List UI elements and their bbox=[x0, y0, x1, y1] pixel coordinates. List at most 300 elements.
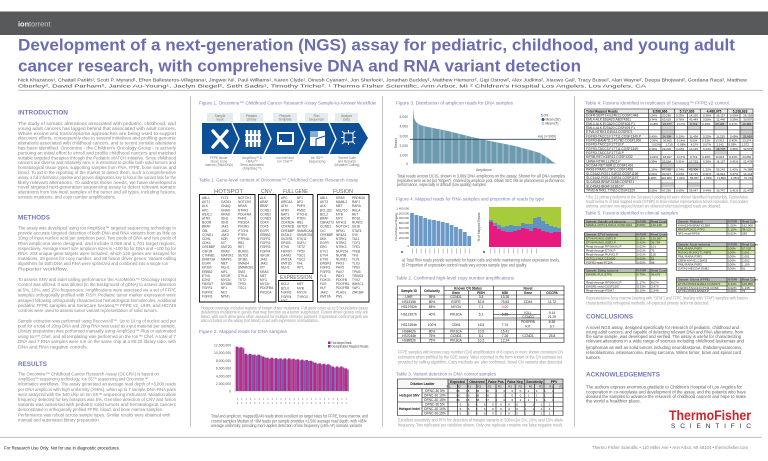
table 2: copy number amplifications: Novel bbox=[524, 286, 533, 290]
hotspot genes: FGFR2 bbox=[202, 290, 213, 294]
workflow step labels: Run bbox=[314, 114, 320, 118]
table 2: copy number amplifications: 21.29 bbox=[548, 315, 556, 319]
table 5 text: CBFB-MYH11.C5M33 bbox=[678, 259, 708, 263]
figure 3: amplicon read distribution: Avg (n=3069) bbox=[538, 134, 556, 138]
hotspot genes: MLH1 bbox=[221, 266, 230, 270]
hotspot genes: AKT1 bbox=[202, 200, 210, 204]
hotspot genes: JAK1 bbox=[221, 225, 229, 229]
table 5 text: 0.42% bbox=[637, 241, 646, 245]
hotspot genes: GNAQ bbox=[221, 204, 231, 208]
table 5 text: %TMR bbox=[728, 243, 738, 247]
table 5 text: Read Count bbox=[742, 278, 758, 282]
full gene list: SUFU bbox=[297, 241, 306, 245]
table 2: copy number amplifications: PIK3CA bbox=[450, 312, 463, 316]
table 3: variant detection: DFNC-30 15% bbox=[424, 412, 446, 416]
fusion genes: CIC bbox=[320, 229, 326, 233]
figure 3 caption: (replicates were as set but "stripes"). Ordered by amplicon pool. Obtain SEC risk an phenomenon performance, bbox=[397, 178, 565, 183]
table 2: copy number amplifications: PIK3CA bbox=[450, 330, 463, 334]
workflow captions: Ion S5™ bbox=[311, 156, 323, 160]
workflow step labels: Prepare bbox=[246, 114, 257, 118]
table 4 fusion names: LMNA-NTRK1.L2N11.P bbox=[586, 159, 621, 163]
fusion genes: BRAF bbox=[320, 216, 329, 220]
fusion genes: FGFR3 bbox=[320, 270, 331, 274]
fusion genes: FLI1 bbox=[320, 274, 327, 278]
chart a: RNA mapped reads: 600,000 bbox=[399, 226, 409, 230]
table 2: copy number amplifications: Gene bbox=[524, 291, 532, 295]
table 5 text: 67,002 bbox=[742, 247, 752, 251]
fusion genes: MYB bbox=[336, 212, 343, 216]
hotspot genes: GATA1 bbox=[221, 200, 231, 204]
intro text: has been identified. Oncomine - the Children's Oncology Group - is actively bbox=[18, 146, 177, 150]
footer: address: Thermo Fisher Scientific • 110 Miller Ave • Ann Arbor, MI 48104 • thermofisher.com bbox=[592, 445, 748, 450]
chart b labels: % of Mapped Reads bbox=[477, 212, 481, 241]
table 4 header bbox=[586, 109, 747, 113]
hotspot genes: KRAS bbox=[221, 249, 230, 253]
fusion genes: EWSR1 bbox=[320, 262, 332, 266]
table 4 values: 0.18% 15,477 0.17% 9,719 0.45% 20,196 0.37% 19,383 bbox=[650, 122, 752, 126]
full gene list: BAP1 bbox=[281, 212, 289, 216]
table 3: variant detection: Expected bbox=[450, 380, 465, 384]
table 5 text: 100% bbox=[728, 247, 736, 251]
legend: Deduplicated Mapped Reads bbox=[332, 344, 369, 348]
table 3: variant detection: False Pos bbox=[488, 380, 504, 384]
hotspot genes: RUNX1 bbox=[238, 249, 249, 253]
workflow step labels: Library bbox=[247, 118, 257, 122]
fusion genes: RAF1 bbox=[352, 200, 360, 204]
full gene list: NF2 bbox=[297, 200, 303, 204]
conclusions text: the same sample, was developed and verified. The assay is useful for characterizing bbox=[586, 334, 741, 339]
workflow captions: AmpliSeq™ & bbox=[242, 156, 263, 160]
table 2 caption: provided by calling algorithm. Copy methods are also confirmed. Novel CN variants also detected. bbox=[398, 360, 563, 364]
intro text: alterations from low-input samples of the tumor and all types, including fusions, bbox=[18, 190, 176, 195]
full gene list: SMARCA4 bbox=[297, 229, 313, 233]
table 4 fusion names: FGFR3-TACC3.F17T11.COSF1349.P bbox=[586, 134, 642, 138]
methods text: Sample extraction was performed using RecoverAll™. Up to 10 ng of nucleic acid per bbox=[18, 318, 177, 323]
intro text: The study of somatic alterations associated with pediatric, childhood, and bbox=[18, 121, 177, 126]
legend bbox=[328, 341, 369, 348]
table 2: copy number amplifications: 80% bbox=[429, 300, 435, 304]
heading: introduction: INTRODUCTION bbox=[18, 110, 68, 116]
fusion genes: TLX3 bbox=[352, 262, 360, 266]
workflow captions bbox=[205, 156, 359, 170]
legend: Mean (T) bbox=[546, 122, 558, 126]
cnv genes: ALK bbox=[260, 196, 267, 200]
cnv genes: FGFR4 bbox=[260, 249, 271, 253]
table 5 text: Sample: ETV6 leukemia bbox=[586, 233, 619, 237]
fusion genes: SS18 bbox=[352, 225, 360, 229]
table 2: copy number amplifications: UHR bbox=[405, 295, 413, 299]
table 1 caption: also included on the assay (not listed) to aid with expression normalization. bbox=[201, 318, 319, 323]
table 2: copy number amplifications: HS19156 bbox=[402, 300, 416, 304]
table 2: copy number amplifications: 52.8 bbox=[478, 300, 484, 304]
fusion genes: HLF bbox=[320, 286, 326, 290]
hotspot genes: TSC1 bbox=[238, 286, 246, 290]
table 2: copy number amplifications: HS8462b bbox=[402, 330, 416, 334]
cnv genes: FGFR2 bbox=[260, 241, 271, 245]
fusion genes: NTRK1 bbox=[336, 237, 347, 241]
table 2: copy number amplifications: CCND3 bbox=[522, 315, 534, 319]
table 2: copy number amplifications: CCND1 bbox=[450, 295, 462, 299]
table 3: variant detection: Observed bbox=[469, 380, 485, 384]
table 4 values bbox=[648, 114, 753, 192]
cnv genes: BRAF bbox=[260, 204, 269, 208]
table 3: variant detection: DFNC-30 15% bbox=[424, 398, 446, 402]
cnv genes: CCND2 bbox=[260, 212, 271, 216]
y axis labels: 6,000,000 bbox=[216, 366, 231, 370]
table 5 text: RUNX1-RUNX1T1.R6R2 bbox=[678, 251, 712, 255]
workflow captions: Ion Chef™ bbox=[277, 160, 293, 164]
table 5 text: 3,479 bbox=[651, 285, 659, 289]
table 2: copy number amplifications: CDK6 bbox=[452, 323, 461, 327]
table 4 fusion names: EML4-ALK.E20A20.COSF409.F1 bbox=[586, 126, 635, 130]
table 2: copy number amplifications: 3.8 bbox=[479, 295, 483, 299]
table 3: variant detection: 6 6 6 6 0 0 0 0 1 1 1 1 bbox=[460, 412, 551, 416]
cnv genes: PDGFRA bbox=[260, 286, 274, 290]
hotspot genes: MYCN bbox=[221, 278, 231, 282]
chart a: RNA mapped reads: 200,000 bbox=[399, 236, 409, 240]
area curve bbox=[413, 108, 556, 164]
table 3: variant detection: DFNC-30 5% bbox=[425, 389, 445, 393]
intro text: young adult cancers has lagged behind that associated with adult cancers. bbox=[18, 126, 176, 131]
table 1 caption: deleterious mutations in genes that may function as a tumor suppressor. Fusion driver genes only are bbox=[201, 310, 369, 315]
full gene list: TSC1 bbox=[297, 253, 305, 257]
fusion genes: ETV6 bbox=[320, 258, 328, 262]
table 5 text: 0.33% bbox=[637, 285, 646, 289]
hotspot genes: BRAF bbox=[202, 225, 211, 229]
figure 2 title: Figure 2. Mapped reads for DNA samples bbox=[199, 329, 288, 334]
figure 3 caption: Total reads across DCIS, shown in 3,069 DNA amplicons on the assay. Shown for all DNA samples bbox=[397, 174, 565, 178]
table 3: variant detection: 98 98 98 97 0 0 0 1 1 1 1 1 bbox=[456, 398, 554, 402]
table 1 category headers: EXPRESSION bbox=[280, 275, 312, 281]
fusion genes: NR4A3 bbox=[336, 233, 347, 237]
table 5 text: EWSR1-FLI1.E7F6 bbox=[586, 273, 612, 277]
table 5 text: 162,908 bbox=[742, 224, 753, 228]
table 5 text: %TMR bbox=[728, 220, 738, 224]
logo: Thermo Fisher Scientific: ThermoFisher bbox=[669, 408, 752, 423]
table 5 text: 100% bbox=[728, 251, 736, 255]
full gene list: DICER1 bbox=[281, 237, 293, 241]
table 4 values: 0.22% 18,917 0.17% 9,719 0.29% 13,015 0.44% 23,050 bbox=[650, 155, 752, 159]
y axis labels: 12,000,000 bbox=[214, 344, 231, 348]
fusion genes: TP63 bbox=[352, 266, 360, 270]
fusion genes bbox=[320, 196, 365, 298]
full gene list: TSC2 bbox=[297, 258, 305, 262]
table 1: gene content bbox=[199, 178, 369, 323]
table 2: copy number amplifications: HS12207b bbox=[401, 312, 417, 316]
table 5 text: CLTCL1-ALK.C31A20 bbox=[586, 256, 616, 260]
hotspot genes: IDH2 bbox=[221, 221, 228, 225]
methods text: controls were used to assess tumor variant representation of solid tumors. bbox=[18, 308, 158, 313]
panel: conclusions bbox=[586, 314, 744, 360]
hotspot genes: ASXL1 bbox=[202, 212, 212, 216]
hotspot genes: MYD88 bbox=[221, 282, 232, 286]
full gene list: CDKN2B bbox=[281, 225, 294, 229]
table 2: copy number amplifications: 7.1 bbox=[479, 305, 483, 309]
workflow step labels: Analyze bbox=[341, 114, 352, 118]
full gene list: FBXW7 bbox=[281, 249, 292, 253]
fusion genes: TPM3 bbox=[352, 270, 361, 274]
results text: were analyzed with the 540 chip on Ion S5™ sequencing instrument. Mutation allele bbox=[18, 392, 177, 397]
hotspot genes: PHF6 bbox=[238, 216, 246, 220]
table 2: copy number amplifications: 75.63 bbox=[501, 300, 509, 304]
conclusions text bbox=[586, 325, 744, 360]
hotspot genes: FGFR1 bbox=[202, 286, 213, 290]
table 5 text: GATA2-MECOM.G5M2 bbox=[678, 267, 709, 271]
intro text: pursuing an initial effort to enroll and profile childhood cancers and matched bbox=[18, 150, 177, 155]
heading: conclusions: CONCLUSIONS bbox=[586, 314, 634, 320]
conclusions text: A novel NGS assay, designed specifically for research of pediatric, childhood and bbox=[586, 325, 739, 330]
figure 1: titles, step labels and captions bbox=[199, 100, 377, 170]
table 2: copy number amplifications: FISH bbox=[477, 291, 485, 295]
fusion genes: CCND1 bbox=[320, 225, 331, 229]
table 4 fusion names: FGFR3-TACC3.F17T10.P bbox=[586, 143, 625, 147]
table 3 caption: frequency. Two replicates per condition shown. Only one replicate contains one false negative result. bbox=[398, 422, 563, 428]
hotspot genes: TP53 bbox=[238, 282, 246, 286]
chart b labels bbox=[477, 212, 540, 254]
fusion genes: PDGFRB bbox=[336, 286, 349, 290]
table 4 header: 5,717,026 bbox=[680, 109, 694, 113]
table 2: copy number amplifications: 7.74 bbox=[502, 323, 508, 327]
methods text: DNA and RNA negative controls. bbox=[18, 344, 88, 349]
table 2: copy number amplifications: 40% bbox=[429, 312, 435, 316]
title: cancer research, with comprehensive DNA and RNA variant detection bbox=[18, 56, 581, 76]
green and gray fills bbox=[584, 220, 755, 282]
hotspot genes: RET bbox=[238, 245, 244, 249]
workflow captions: HiMol™ bbox=[246, 160, 258, 164]
workflow captions: Torrent Suite bbox=[338, 156, 356, 160]
workflow captions: (AmpliSeq™) bbox=[243, 166, 261, 170]
table 5 text: 2,001 bbox=[742, 251, 750, 255]
table 1 category headers: CNV bbox=[261, 189, 272, 195]
hotspot genes: CBL bbox=[202, 229, 208, 233]
table 5 text: PML-RARA.P6R2 bbox=[678, 263, 702, 267]
table 5 text: MAML2-CRTC1.M1C2.COSF1024 bbox=[586, 223, 632, 227]
table 5 text: 2.11% bbox=[637, 237, 646, 241]
full gene list: PTCH1 bbox=[297, 212, 308, 216]
table 5 text: FGFR3-read-P7104 bbox=[586, 260, 613, 264]
table 5 text: Read Count bbox=[651, 269, 667, 273]
fusion genes: MLLT10 bbox=[336, 208, 348, 212]
hotspot genes: PTCH1 bbox=[238, 229, 249, 233]
table 4 fusion names bbox=[586, 114, 642, 192]
methods text: Reporter workflow. bbox=[18, 266, 68, 271]
figure 3 title: Figure 3. Distribution of amplicon reads for DNA samples bbox=[396, 100, 514, 106]
table 5 text: Read-through RPS6KA2.P bbox=[586, 281, 622, 285]
hotspot genes: NOTCH2 bbox=[238, 200, 251, 204]
figure 2 caption: control samples Median of ~8M reads per sample provides >2,500 average read depth, with >95% bbox=[211, 418, 367, 424]
hotspot genes: CSF1R bbox=[202, 249, 213, 253]
table 5 text: 0.01% bbox=[637, 253, 646, 257]
y axis labels: 4,000,000 bbox=[216, 374, 231, 378]
table 4 caption: isoforms, and rarer non-targeted fusions are observed when total mapped reads are obtained. bbox=[586, 204, 721, 208]
methods text: To assess SNV and indel calling performance the AcroMetrix™ Oncology Hotspot bbox=[18, 277, 177, 282]
full gene list: APC bbox=[281, 196, 288, 200]
hotspot genes: TET2 bbox=[238, 278, 246, 282]
fusion genes: STAT6 bbox=[352, 229, 362, 233]
figure 2: mapped reads bar chart bbox=[199, 329, 369, 428]
fusion genes: NTRK3 bbox=[336, 245, 347, 249]
fusion genes: TAL1 bbox=[352, 237, 360, 241]
cnv genes: ARAF bbox=[260, 200, 269, 204]
fusion genes: FGFR1 bbox=[320, 266, 331, 270]
hotspot genes: ATRX bbox=[202, 216, 211, 220]
methods text: at 5%, 10%, and 15% frequencies. Amplifications were assessed via a set of FFPE bbox=[18, 287, 176, 292]
methods text: pediatric FFPE samples and SeraCare Seraseq™ FFPE v2, UHR, and HD749 bbox=[18, 303, 177, 308]
conclusions text: retinoblastoma, osteosarcoma, Ewing sarcoma, Wilms tumor, brain and spinal cord bbox=[586, 350, 741, 355]
expression genes: MYC bbox=[281, 299, 289, 303]
y axis labels: 8,000,000 bbox=[216, 359, 231, 363]
cnv genes: ERBB2 bbox=[260, 233, 271, 237]
table 5 text: 2,546 bbox=[651, 289, 659, 293]
full gene list: PTEN bbox=[297, 216, 306, 220]
full gene list: ATRX bbox=[281, 208, 290, 212]
table 2: copy number amplifications: MDI bbox=[502, 291, 508, 295]
legend bbox=[541, 114, 561, 126]
table 5 text: 101 bbox=[651, 245, 656, 249]
results text: demonstrated in orthogonally profiled FFPE, blood, and bone marrow samples. bbox=[18, 407, 163, 412]
logo: Thermo Fisher Scientific: SCIENTIFIC bbox=[671, 423, 751, 430]
acknowledgements text: cooperation in co-neoplasia and development of the assay, and the patients who have bbox=[586, 389, 746, 394]
table 5 text: 1.00% bbox=[728, 224, 737, 228]
table 5 text: 76 bbox=[742, 289, 746, 293]
table 1 category headers: HOTSPOT bbox=[214, 189, 244, 195]
hotspot genes: ALK bbox=[202, 204, 209, 208]
table 5 text: 0.10% bbox=[637, 289, 646, 293]
table 5 caption: characterized by orthogonal methods. All expected primary isoforms detected. bbox=[586, 300, 709, 306]
methods text: assayed following orthogonally characterized hematological biomolecules. Additional bbox=[18, 298, 176, 303]
panel: methods bbox=[18, 214, 177, 349]
table 4 values: 0.34% 29,236 0.23% 13,149 0.44% 19,747 0.66% 34,575 bbox=[649, 147, 752, 151]
table 5 text: 1.17% bbox=[637, 281, 646, 285]
hotspot genes: STK11 bbox=[238, 274, 248, 278]
cnv genes: FGFR1 bbox=[260, 237, 271, 241]
table 1 category headers: FUSION bbox=[333, 189, 353, 195]
workflow step labels: Sequencer bbox=[309, 118, 325, 122]
table 5 text: %TMR bbox=[637, 269, 647, 273]
table 4 fusion names: ETV6-NTRK3.E4N14.COSF571 bbox=[586, 130, 633, 134]
table 2: copy number amplifications: Known CN Status bbox=[454, 286, 482, 290]
table 4 fusion names: TPM3-NTRK1.T7N10.COSF1329 bbox=[586, 188, 635, 192]
hotspot genes: SETD2 bbox=[238, 253, 249, 257]
cnv genes: CCND3 bbox=[260, 216, 271, 220]
methods text: The assay was developed using Ion AmpliSeq™ targeted sequencing technology to bbox=[18, 226, 177, 230]
hotspot genes: CCND1 bbox=[202, 233, 213, 237]
table 2: copy number amplifications: 11.72 bbox=[548, 300, 556, 304]
hotspot genes: FBXW7 bbox=[202, 282, 213, 286]
table 5 text: Sample: Spindle cell sarcoma bbox=[586, 219, 626, 223]
cnv genes: CDK4 bbox=[260, 221, 269, 225]
hotspot genes: CDH1 bbox=[202, 237, 211, 241]
chart a: RNA mapped reads: 800,000 bbox=[399, 221, 409, 225]
table 5 text: 76 bbox=[651, 249, 655, 253]
gene list boxes bbox=[200, 194, 369, 302]
results text: frequency detected for key hotspots was 5%. Germline detection of CNV and fusion bbox=[18, 397, 177, 402]
workflow captions: Semi-automated bbox=[240, 163, 264, 167]
intro text: novel targeted next-generation sequencing assay to detect relevant somatic bbox=[18, 185, 177, 190]
fusion genes: NPM1 bbox=[336, 229, 345, 233]
table 2: copy number amplifications: 75% bbox=[429, 334, 435, 338]
acknowledgements text bbox=[586, 384, 746, 404]
table 3: variant detection: 98 98 98 98 0 0 0 0 1 1 1 1 bbox=[456, 394, 554, 398]
gray blank cells bbox=[661, 122, 753, 187]
table 5 text: 38,121 bbox=[742, 228, 752, 232]
cnv genes: MYC bbox=[260, 278, 268, 282]
title: Development of a next-generation (NGS) assay for pediatric, childhood, and young adult bbox=[18, 36, 735, 54]
table 5 text: 1,100 bbox=[742, 263, 750, 267]
table 3: variant detection: 98 98 98 98 0 0 0 0 1 1 1 1 bbox=[456, 389, 554, 393]
full gene list: PMS2 bbox=[297, 208, 306, 212]
heading: results: RESULTS bbox=[18, 361, 48, 368]
logo: Thermo Fisher Scientific bbox=[669, 408, 752, 430]
table 5 text: ETV6-NTRK3.E5N15.P bbox=[678, 289, 709, 293]
fusion genes: PDGFB bbox=[336, 278, 347, 282]
expression genes: FGFR4 bbox=[281, 295, 292, 299]
table 2 caption: FFPE samples with known copy number (CN) amplifications of 6 copies or more shown consistent CN bbox=[398, 350, 563, 354]
full gene list: CDKN2A bbox=[281, 221, 295, 225]
table 5 text: 0.02% bbox=[728, 232, 737, 236]
hotspot genes: DNMT3A bbox=[202, 258, 216, 262]
table 5 text: 1,135 bbox=[742, 286, 750, 290]
table 5 text: Read Count bbox=[651, 219, 667, 223]
fusion genes: FUS bbox=[320, 282, 326, 286]
hotspot genes: CTNNB1 bbox=[202, 253, 215, 257]
figure 2 caption: average uniformity, providing more apples detection of low frequency (≥5% AF) somatic variants bbox=[211, 423, 362, 428]
conclusions text: young adult cancers, and capable of detecting relevant DNA and RNA alterations, from bbox=[586, 330, 743, 334]
fusion genes: ROS1 bbox=[352, 216, 361, 220]
intro text: hematological tissue types, supporting samples from FNA, FFPE, bone marrow, and bbox=[18, 165, 177, 170]
results text: Performance was robust across sample types. Similar results were obtained with bbox=[18, 412, 171, 417]
hotspot genes: ABL1 bbox=[202, 196, 210, 200]
hotspot genes: BCOR bbox=[202, 221, 212, 225]
table 4 header: 8,598,666 bbox=[653, 109, 667, 113]
hotspot genes: SMO bbox=[238, 270, 246, 274]
y axis labels: 0 bbox=[229, 390, 231, 394]
figure 2 caption: Total and amplicon, mappedDAM reads show excellent on target rates for FFPE, bone marrow, and bbox=[211, 414, 369, 418]
workflow captions: (Mutation Calling) bbox=[335, 163, 359, 167]
fusion genes: RELA bbox=[352, 208, 361, 212]
expression genes: MET bbox=[297, 282, 304, 286]
expression genes: MYCN bbox=[297, 291, 307, 295]
table 5 text: 100% bbox=[728, 263, 736, 267]
fusion genes: MAML2 bbox=[336, 200, 347, 204]
table 5 text: Read Count bbox=[742, 220, 758, 224]
fusion genes: YAP1 bbox=[352, 286, 360, 290]
panel: results bbox=[18, 361, 177, 422]
table 5 text: KIAA1549-BRAF.K15B9 bbox=[678, 224, 710, 228]
intro text: Whole exome and transcriptome approaches are being used to support bbox=[18, 131, 177, 136]
table 5 text: PML-RARA.P3R3 bbox=[678, 255, 702, 259]
table 4 fusion names: SLC34A2-ROS1.S4R34.COSF1197 bbox=[586, 176, 639, 180]
table 3 caption: Excellent sensitivity and PPV for detection of hotspot variants in 5DNAQet 5%, 10%, and 15% allele bbox=[398, 418, 564, 422]
workflow step labels bbox=[207, 113, 358, 122]
table 4 fusion names: KIF5B-RET.K15R12.COSF1232 bbox=[586, 155, 633, 159]
fusion genes: TRIM24 bbox=[352, 274, 364, 278]
results text: variants was assessed with pediatric solid tumors and hematological cancers bbox=[18, 402, 177, 407]
methods text: provide accurate targeted detection of both DNA and RNA variants from as little as bbox=[18, 231, 177, 236]
y axis: 5,000 bbox=[400, 115, 408, 119]
table 5 text: PAX3-FOXO1.P7F2 bbox=[678, 228, 705, 232]
results text: The Oncomine™ Childhood Cancer Research Assay (OCCRA) is based on bbox=[18, 372, 160, 376]
table 2: copy number amplifications: Sample ID bbox=[401, 289, 418, 293]
cnv genes: MET bbox=[260, 274, 267, 278]
workflow captions: Sequencing bbox=[309, 160, 326, 164]
intro text: likely relevant alterations. To address these needs, we have developed a bbox=[18, 180, 177, 185]
table 2: copy number amplifications: 8.38 bbox=[549, 320, 555, 324]
fusion genes: PLAG1 bbox=[336, 290, 347, 294]
table 4 values: 0.40% 34,394 0.20% 11,434 0.25% 11,220 0.49% 25,669 bbox=[649, 134, 752, 138]
fusion genes: MYC bbox=[336, 216, 344, 220]
table 2: copy number amplifications: EGFR bbox=[451, 300, 461, 304]
